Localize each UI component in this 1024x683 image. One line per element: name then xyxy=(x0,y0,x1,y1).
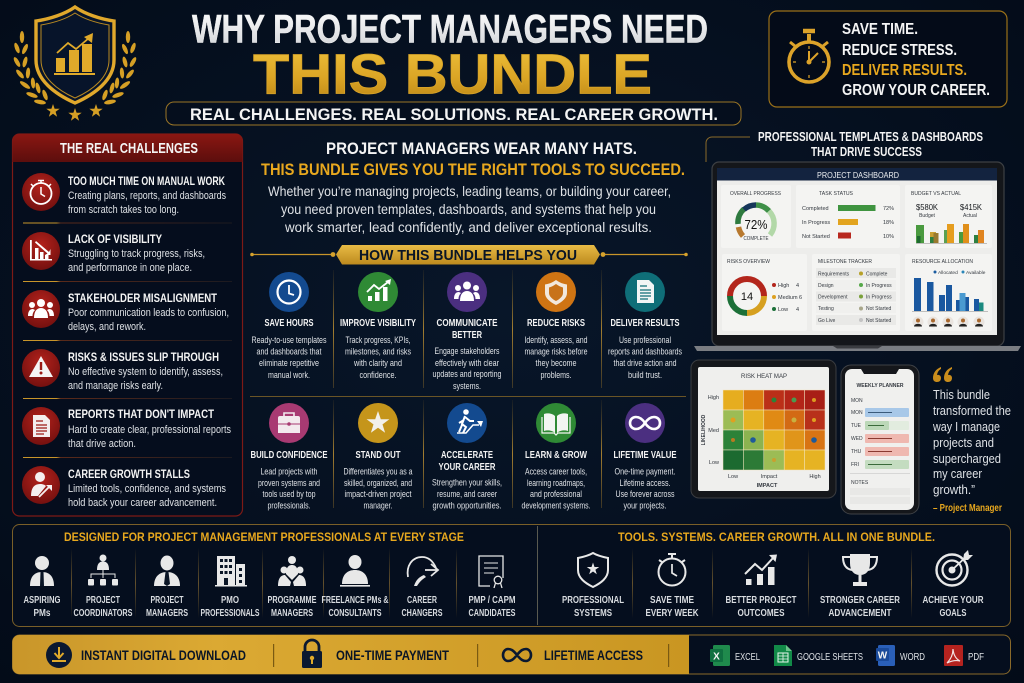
benefit: communicate better: Engage stakeholders xyxy=(434,346,500,357)
benefit: reduce risks: problems. xyxy=(540,370,572,381)
card: milestone tracker: In Progress xyxy=(866,283,892,289)
benefit: improve visibility: IMPROVE VISIBILITY xyxy=(340,318,416,329)
benefit: reduce risks xyxy=(524,272,588,381)
benefit: one-time payment xyxy=(302,640,450,668)
outcome: better project outcomes: OUTCOMES xyxy=(738,608,785,619)
audience: project coordinators: PROJECT xyxy=(86,595,120,606)
tablet: risk heat map: Low xyxy=(728,474,738,480)
phone: weekly planner: MON xyxy=(851,398,863,404)
card: milestone tracker: Not Started xyxy=(866,318,892,324)
benefit: build confidence: professionals. xyxy=(268,500,310,512)
phone: weekly planner xyxy=(841,365,919,514)
outcome: stronger career advancement xyxy=(820,554,901,619)
banner: how this bundle helps you xyxy=(250,245,688,264)
benefit: accelerate your career xyxy=(432,403,502,512)
intro heading: THIS BUNDLE GIVES YOU THE RIGHT TOOLS TO SUCCEED. xyxy=(261,160,685,179)
benefit: build confidence: tools used by top xyxy=(262,489,316,500)
tablet: risk heat map: High xyxy=(809,474,821,480)
audience: freelance PMs and consultants xyxy=(322,555,388,619)
panel: the real challenges xyxy=(12,134,242,516)
card: overall progress: COMPLETE xyxy=(744,236,769,242)
card: risks overview: 4 xyxy=(796,283,799,289)
callout text: REDUCE STRESS. xyxy=(842,42,957,59)
format: google sheets xyxy=(774,645,863,666)
card: milestone tracker: In Progress xyxy=(866,294,892,300)
benefit: stand out: Differentiates you as a xyxy=(344,466,413,478)
benefit: build confidence xyxy=(250,403,328,512)
audience: PMP and CAPM candidates: CANDIDATES xyxy=(468,608,516,619)
audience: PMP and CAPM candidates xyxy=(468,556,516,619)
dashboard title bar: PROJECT DASHBOARD xyxy=(817,171,899,180)
benefit: improve visibility: with clarity and xyxy=(353,358,402,369)
format: word: W xyxy=(878,650,888,662)
challenge: lack of visibility: Struggling to track progress, risks, xyxy=(68,248,205,260)
callout text: GROW YOUR CAREER. xyxy=(842,82,990,99)
card: budget vs actual: $415K xyxy=(960,203,983,212)
challenge: risks and issues xyxy=(22,349,223,392)
card: risks overview: RISKS OVERVIEW xyxy=(727,259,771,265)
card: risks overview: 4 xyxy=(796,307,799,313)
outcome: professional systems: PROFESSIONAL xyxy=(562,595,624,606)
audience: freelance PMs and consultants: CONSULTANTS xyxy=(328,608,382,619)
benefit: deliver results xyxy=(608,272,682,381)
format: google sheets: GOOGLE SHEETS xyxy=(797,651,863,663)
phone: weekly planner: NOTES xyxy=(851,480,869,486)
benefit: learn and grow: development systems. xyxy=(522,500,590,512)
challenge: lack of visibility: LACK OF VISIBILITY xyxy=(68,234,162,246)
phone: weekly planner: FRI xyxy=(851,462,859,468)
benefit: deliver results: build trust. xyxy=(628,370,662,381)
card: budget vs actual: BUDGET VS ACTUAL xyxy=(911,191,961,197)
benefit: lifetime value: One-time payment. xyxy=(614,466,676,478)
phone: weekly planner: TUE xyxy=(851,423,862,429)
card: budget vs actual: $580K xyxy=(916,203,939,212)
challenge: career growth: hold back your career advancement. xyxy=(68,497,217,509)
card: task status xyxy=(796,185,900,248)
logo: gold shield with laurels xyxy=(12,7,138,121)
phone: weekly planner: THU xyxy=(851,449,862,455)
laptop: project dashboard xyxy=(694,162,1021,351)
card: resource allocation: RESOURCE ALLOCATION xyxy=(912,259,973,265)
audience: project managers xyxy=(146,556,188,619)
challenge: lack of visibility xyxy=(22,232,205,274)
format: word xyxy=(876,645,925,666)
panel heading xyxy=(12,134,242,162)
challenge: stakeholder misalignment: STAKEHOLDER MISALIGNMENT xyxy=(68,293,217,305)
benefit: save hours xyxy=(252,272,327,381)
outcome: save time every week xyxy=(646,554,699,619)
card: overall progress xyxy=(721,185,791,248)
audience: freelance PMs and consultants: FREELANCE PMs & xyxy=(322,595,388,606)
phone: weekly planner: WED xyxy=(851,436,863,442)
callout text: DELIVER RESULTS. xyxy=(842,62,967,79)
format: excel: EXCEL xyxy=(735,651,760,663)
outcome: professional systems: SYSTEMS xyxy=(574,608,612,619)
benefit: lifetime value: Use forever across xyxy=(616,489,675,500)
audience: career changers xyxy=(402,557,443,619)
card: risks overview: 6 xyxy=(799,295,802,301)
testimonial quote: projects and xyxy=(933,436,994,450)
audience: project coordinators: COORDINATORS xyxy=(74,608,133,619)
testimonial quote: my career xyxy=(933,467,982,481)
team avatars xyxy=(912,316,984,328)
testimonial quote: – Project Manager xyxy=(933,503,1002,514)
phone: weekly planner: WEEKLY PLANNER xyxy=(856,383,904,389)
heading: templates and dashboards: THAT DRIVE SUCCESS xyxy=(811,144,922,159)
title: WHY PROJECT MANAGERS NEED xyxy=(192,8,708,52)
card: overall progress: 72% xyxy=(744,217,768,232)
tablet: risk heat map: Impact xyxy=(761,474,778,480)
title: THIS BUNDLE xyxy=(253,42,652,106)
challenge: career growth xyxy=(22,466,226,509)
card: milestone tracker: MILESTONE TRACKER xyxy=(818,259,872,265)
phone: weekly planner: MON xyxy=(851,410,863,416)
audience: PMO professionals: PROFESSIONALS xyxy=(200,608,260,619)
audience: aspiring PMs: ASPIRING xyxy=(24,595,61,606)
benefit: reduce risks: Identify, assess, and xyxy=(524,335,588,346)
benefit: deliver results: Use professional xyxy=(619,335,671,346)
format: word: WORD xyxy=(900,651,925,663)
challenge: reports: REPORTS THAT DON'T IMPACT xyxy=(68,409,214,421)
card: task status: In Progress xyxy=(802,220,830,226)
benefit: reduce risks: REDUCE RISKS xyxy=(527,318,585,329)
audience: programme managers: MANAGERS xyxy=(271,608,313,619)
audience: project coordinators xyxy=(74,554,133,619)
benefit: save hours: manual work. xyxy=(268,370,310,381)
benefit: improve visibility: confidence. xyxy=(360,370,396,381)
benefit: one-time payment: ONE-TIME PAYMENT xyxy=(336,648,450,663)
benefit: instant digital download: INSTANT DIGITAL DOWNLOAD xyxy=(81,648,246,663)
card: task status: TASK STATUS xyxy=(819,191,853,197)
benefit: stand out: manager. xyxy=(364,500,392,512)
benefit: accelerate your career: resume, and career xyxy=(437,489,497,500)
tablet: risk heat map: Med xyxy=(708,428,719,434)
audience: aspiring PMs xyxy=(24,556,61,619)
card: milestone tracker xyxy=(812,254,900,331)
outcome: stronger career advancement: ADVANCEMENT xyxy=(828,608,892,619)
heading: tools and systems: TOOLS. SYSTEMS. CAREER GROWTH. ALL IN ONE BUNDLE. xyxy=(618,530,935,544)
benefit: deliver results: that drive action and xyxy=(614,358,676,369)
card: budget vs actual: Actual xyxy=(963,213,977,219)
intro paragraph: work smarter, lead confidently, and deliver exceptional results. xyxy=(284,219,652,235)
card: risks overview: 14 xyxy=(741,291,753,303)
benefit: lifetime value xyxy=(614,403,677,512)
audience: PMP and CAPM candidates: PMP / CAPM xyxy=(468,595,516,606)
outcome: achieve your goals: GOALS xyxy=(940,608,967,619)
benefit: build confidence: BUILD CONFIDENCE xyxy=(250,450,328,461)
benefit: save hours: eliminate repetitive xyxy=(259,358,319,369)
format: pdf: PDF xyxy=(968,651,984,663)
outcome: achieve your goals: ACHIEVE YOUR xyxy=(922,595,984,606)
benefit: accelerate your career: Strengthen your skills, xyxy=(432,478,502,488)
benefit: learn and grow: Access career tools, xyxy=(525,466,587,478)
card: milestone tracker: Testing xyxy=(818,306,834,312)
tablet: risk heat map: LIKELIHOOD xyxy=(701,414,707,445)
card: milestone tracker: Design xyxy=(818,283,834,289)
card: milestone tracker: Requirements xyxy=(818,272,850,278)
benefit: instant digital download xyxy=(46,642,246,668)
bottom bar: purchase benefits xyxy=(12,635,1010,674)
intro paragraph: you need proven templates, dashboards, and systems that help you xyxy=(281,201,656,217)
heading: templates and dashboards xyxy=(706,129,983,162)
benefit: stand out: STAND OUT xyxy=(356,450,400,461)
tablet: risk heat map: RISK HEAT MAP xyxy=(741,373,787,380)
card: risks overview: High xyxy=(778,283,789,289)
card: risks overview xyxy=(722,254,807,331)
card: milestone tracker: Complete xyxy=(866,272,888,278)
benefit: lifetime access xyxy=(503,648,643,663)
testimonial quote: supercharged xyxy=(933,452,1001,466)
challenge: manual work: from scratch takes too long. xyxy=(68,204,179,216)
testimonial quote: way I manage xyxy=(932,420,1000,434)
outcome: save time every week: EVERY WEEK xyxy=(646,608,699,619)
benefit: stand out xyxy=(344,403,413,512)
card: resource allocation: Allocated xyxy=(938,270,958,276)
tablet: risk heat map: High xyxy=(708,395,719,401)
challenge: stakeholder misalignment: delays, and rework. xyxy=(68,321,146,333)
benefit: accelerate your career: growth opportunities. xyxy=(432,500,502,512)
challenge: reports xyxy=(22,407,231,450)
callout: save time xyxy=(769,11,1007,107)
card: task status: Not Started xyxy=(802,234,830,240)
benefit: improve visibility xyxy=(340,272,416,381)
tablet: risk heat map: IMPACT xyxy=(757,483,778,489)
title xyxy=(192,8,708,106)
card: milestone tracker: Development xyxy=(818,294,848,300)
benefit: improve visibility: milestones, and risks xyxy=(345,346,411,358)
card: overall progress: OVERALL PROGRESS xyxy=(730,191,781,197)
outcome: stronger career advancement: STRONGER CAREER xyxy=(820,595,901,606)
panel heading: THE REAL CHALLENGES xyxy=(60,141,198,157)
audience: career changers: CHANGERS xyxy=(402,608,443,619)
intro paragraph xyxy=(268,183,671,235)
benefit: deliver results: reports and dashboards xyxy=(608,346,682,358)
challenge: manual work: Creating plans, reports, and dashboards xyxy=(68,190,226,202)
card: milestone tracker: Not Started xyxy=(866,306,892,312)
benefit: lifetime access: LIFETIME ACCESS xyxy=(544,648,643,663)
card: budget vs actual xyxy=(905,185,992,248)
outcome: better project outcomes: BETTER PROJECT xyxy=(726,595,796,606)
challenge: stakeholder misalignment: Poor communication leads to confusion, xyxy=(68,307,229,319)
testimonial quote xyxy=(932,367,1011,514)
heat map grid xyxy=(723,390,825,470)
audience: PMO professionals xyxy=(200,556,260,619)
subtitle pill: REAL CHALLENGES. REAL SOLUTIONS. REAL CAREER GROWTH. xyxy=(190,106,718,124)
benefit: learn and grow: learning roadmaps, xyxy=(527,478,585,489)
intro paragraph: Whether you’re managing projects, leading teams, or building your career, xyxy=(268,183,671,199)
benefit: accelerate your career: ACCELERATE xyxy=(441,450,493,461)
benefit: build confidence: Lead projects with xyxy=(260,466,318,478)
benefit: improve visibility: Track progress, KPIs, xyxy=(346,335,410,346)
benefit: communicate better: updates and reporting xyxy=(432,369,502,380)
benefit: deliver results: DELIVER RESULTS xyxy=(610,318,680,329)
outcome: save time every week: SAVE TIME xyxy=(650,595,694,606)
banner: how this bundle helps you: HOW THIS BUNDLE HELPS YOU xyxy=(359,247,577,264)
card: risks overview: Low xyxy=(778,307,788,313)
challenge: risks and issues: No effective system to identify, assess, xyxy=(68,366,223,378)
dashboard title bar xyxy=(717,168,997,180)
benefit: stand out: impact-driven project xyxy=(344,489,412,500)
tablet: risk heat map xyxy=(691,360,836,498)
card: budget vs actual: Budget xyxy=(919,213,936,219)
benefit: save hours: and dashboards that xyxy=(256,346,322,358)
challenge: career growth: Limited tools, confidence, and systems xyxy=(68,483,226,495)
benefit: reduce risks: they become xyxy=(536,358,576,369)
benefit: save hours: SAVE HOURS xyxy=(264,318,314,329)
format: excel: X xyxy=(713,652,720,662)
card: resource allocation: Available xyxy=(966,270,986,276)
benefit: reduce risks: manage risks before xyxy=(524,346,588,358)
testimonial quote: transformed the xyxy=(933,404,1011,418)
benefit: learn and grow xyxy=(522,403,590,512)
challenge: manual work xyxy=(22,173,226,216)
card: resource allocation xyxy=(905,254,992,331)
audience: programme managers xyxy=(268,556,317,619)
audience: project managers: MANAGERS xyxy=(146,608,188,619)
benefit: communicate better: systems. xyxy=(453,381,481,392)
benefit: learn and grow: LEARN & GROW xyxy=(525,450,587,461)
challenge: stakeholder misalignment xyxy=(22,290,229,333)
callout text xyxy=(842,21,990,99)
card: task status: Completed xyxy=(802,206,829,212)
challenge: reports: Hard to create clear, professional reports xyxy=(68,424,231,436)
challenge: lack of visibility: and performance in one place. xyxy=(68,262,192,274)
outcome: professional systems xyxy=(562,553,624,619)
challenge: reports: that drive action. xyxy=(68,438,136,450)
audience: aspiring PMs: PMs xyxy=(34,608,51,619)
benefit: communicate better xyxy=(432,272,502,392)
challenge: risks and issues: RISKS & ISSUES SLIP THROUGH xyxy=(68,352,219,364)
card: risks overview: Medium xyxy=(778,295,798,301)
benefit: build confidence: proven systems and xyxy=(258,478,320,489)
challenge: manual work: TOO MUCH TIME ON MANUAL WORK xyxy=(68,176,226,188)
outcome: achieve your goals xyxy=(922,550,984,619)
format: pdf xyxy=(944,645,984,666)
benefit: communicate better: effectively with clear xyxy=(435,358,499,369)
challenge: career growth: CAREER GROWTH STALLS xyxy=(68,469,190,481)
card: task status: 18% xyxy=(883,220,894,226)
benefit: communicate better: COMMUNICATE xyxy=(436,318,498,329)
audience: career changers: CAREER xyxy=(407,595,438,606)
audience: programme managers: PROGRAMME xyxy=(268,595,317,606)
format: excel xyxy=(710,645,760,666)
challenge: risks and issues: and manage risks early. xyxy=(68,380,163,392)
card: milestone tracker: Go Live xyxy=(818,318,835,324)
benefit: lifetime value: your projects. xyxy=(624,500,666,512)
icon: gold stopwatch xyxy=(789,31,829,82)
panel: audience and outcomes xyxy=(12,524,1010,626)
heading: designed for: DESIGNED FOR PROJECT MANAGEMENT PROFESSIONALS AT EVERY STAGE xyxy=(64,530,464,544)
benefit: learn and grow: and professional xyxy=(530,489,582,500)
testimonial quote: growth.” xyxy=(933,483,975,497)
card: task status: 72% xyxy=(883,206,894,212)
benefit: stand out: skilled, organized, and xyxy=(344,478,412,489)
intro heading: PROJECT MANAGERS WEAR MANY HATS. xyxy=(326,140,637,158)
tablet: risk heat map: Low xyxy=(709,460,719,466)
icon: quotation mark xyxy=(933,367,952,382)
benefit: lifetime value: LIFETIME VALUE xyxy=(614,450,677,461)
intro heading xyxy=(261,140,685,179)
testimonial quote: This bundle xyxy=(933,388,990,402)
benefit: communicate better: BETTER xyxy=(452,330,483,341)
card: task status: 10% xyxy=(883,234,894,240)
benefit: accelerate your career: YOUR CAREER xyxy=(438,462,496,473)
audience: PMO professionals: PMO xyxy=(221,595,239,606)
benefit: save hours: Ready-to-use templates xyxy=(252,335,327,346)
benefit: lifetime value: Lifetime access. xyxy=(620,478,670,489)
audience: project managers: PROJECT xyxy=(150,595,184,606)
callout text: SAVE TIME. xyxy=(842,21,918,38)
outcome: better project outcomes xyxy=(726,554,796,619)
